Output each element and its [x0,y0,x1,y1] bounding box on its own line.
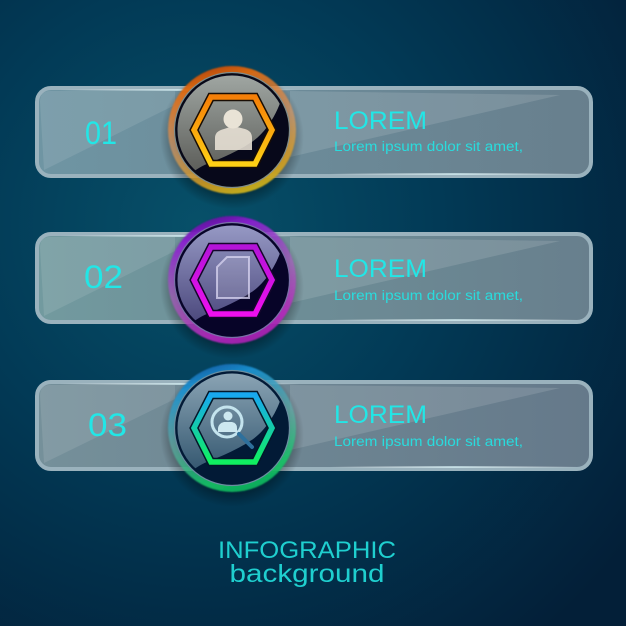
heading: LOREM [334,255,427,283]
icon: document [217,257,249,298]
glass gloss right [290,237,560,303]
glass gloss left [40,237,175,316]
number 01: 01 [85,115,117,151]
hexagon frame [194,395,272,462]
badge 1: orange [160,65,304,209]
description: Lorem ipsum dolor sit amet, [334,288,523,303]
gloss [178,76,280,170]
panel 2 [37,234,591,322]
icon: person [215,110,252,150]
gloss [178,374,280,468]
panel 1 [37,88,591,176]
heading: LOREM [334,401,427,429]
glass gloss left [40,91,175,170]
description: Lorem ipsum dolor sit amet, [334,434,523,449]
glass gloss right [290,385,560,450]
heading: LOREM [334,107,427,135]
icon: search person [212,407,252,447]
hexagon frame [194,247,272,314]
hexagon frame [194,97,272,164]
description: Lorem ipsum dolor sit amet, [334,139,523,154]
number 02: 02 [84,259,123,295]
title: INFOGRAPHIC [218,537,396,564]
panel 3 [37,382,591,469]
glass gloss left [40,385,175,463]
glass gloss right [290,91,560,157]
badge 2: purple [160,215,304,359]
number 03: 03 [88,407,127,443]
title: background [230,560,384,588]
title [218,537,396,588]
gloss [178,226,280,320]
badge 3: blue green [160,363,304,507]
